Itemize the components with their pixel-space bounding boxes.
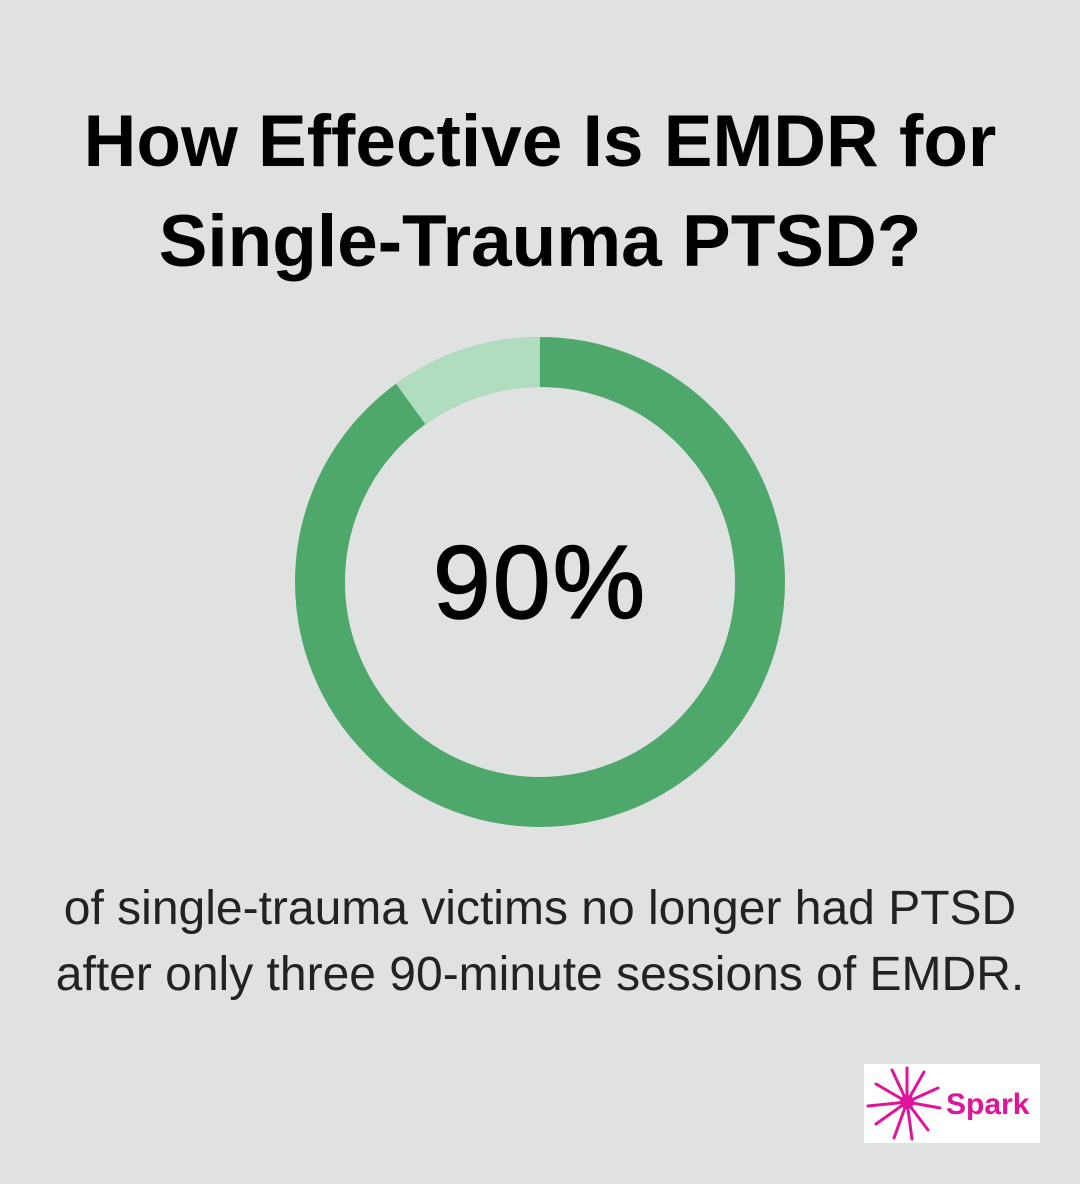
description text <box>56 882 1024 1001</box>
description text: of single-trauma victims no longer had PTSD <box>64 882 1016 935</box>
logo: Spark: Spark <box>946 1088 1030 1121</box>
title <box>84 101 996 282</box>
description text: after only three 90-minute sessions of EMDR. <box>56 948 1024 1001</box>
logo: Spark <box>864 1064 1040 1143</box>
title: Single-Trauma PTSD? <box>159 201 921 282</box>
big percentage: 90% <box>433 525 647 641</box>
title: How Effective Is EMDR for <box>84 101 996 182</box>
